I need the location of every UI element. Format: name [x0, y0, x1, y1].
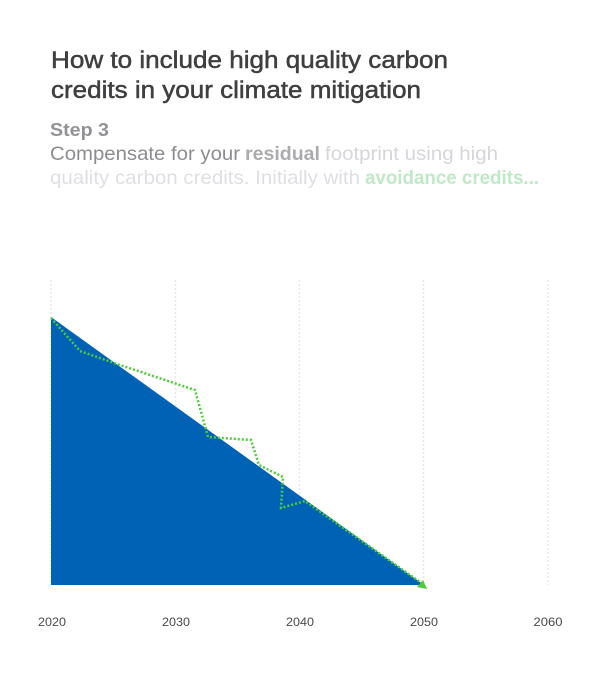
- title: credits in your climate mitigation: [51, 77, 421, 104]
- chart: [38, 280, 563, 629]
- step description: quality carbon credits. Initially with: [50, 167, 360, 189]
- arrow head: [417, 580, 427, 589]
- x axis labels: 2030: [162, 615, 190, 629]
- step description: avoidance credits...: [365, 167, 539, 189]
- x axis labels: 2040: [286, 615, 314, 629]
- step description: [50, 143, 539, 189]
- x axis labels: [38, 615, 563, 629]
- title: [51, 47, 448, 104]
- step description: Compensate for your: [50, 143, 241, 165]
- x axis labels: 2020: [38, 615, 66, 629]
- x axis labels: 2050: [410, 615, 438, 629]
- step heading: Step 3: [50, 120, 109, 140]
- title: How to include high quality carbon: [51, 47, 448, 74]
- residual emissions area: [51, 317, 424, 585]
- step description: residual: [245, 143, 320, 165]
- step description: footprint using high: [325, 143, 498, 165]
- x axis labels: 2060: [534, 615, 563, 629]
- avoidance credits dotted path: [51, 318, 420, 582]
